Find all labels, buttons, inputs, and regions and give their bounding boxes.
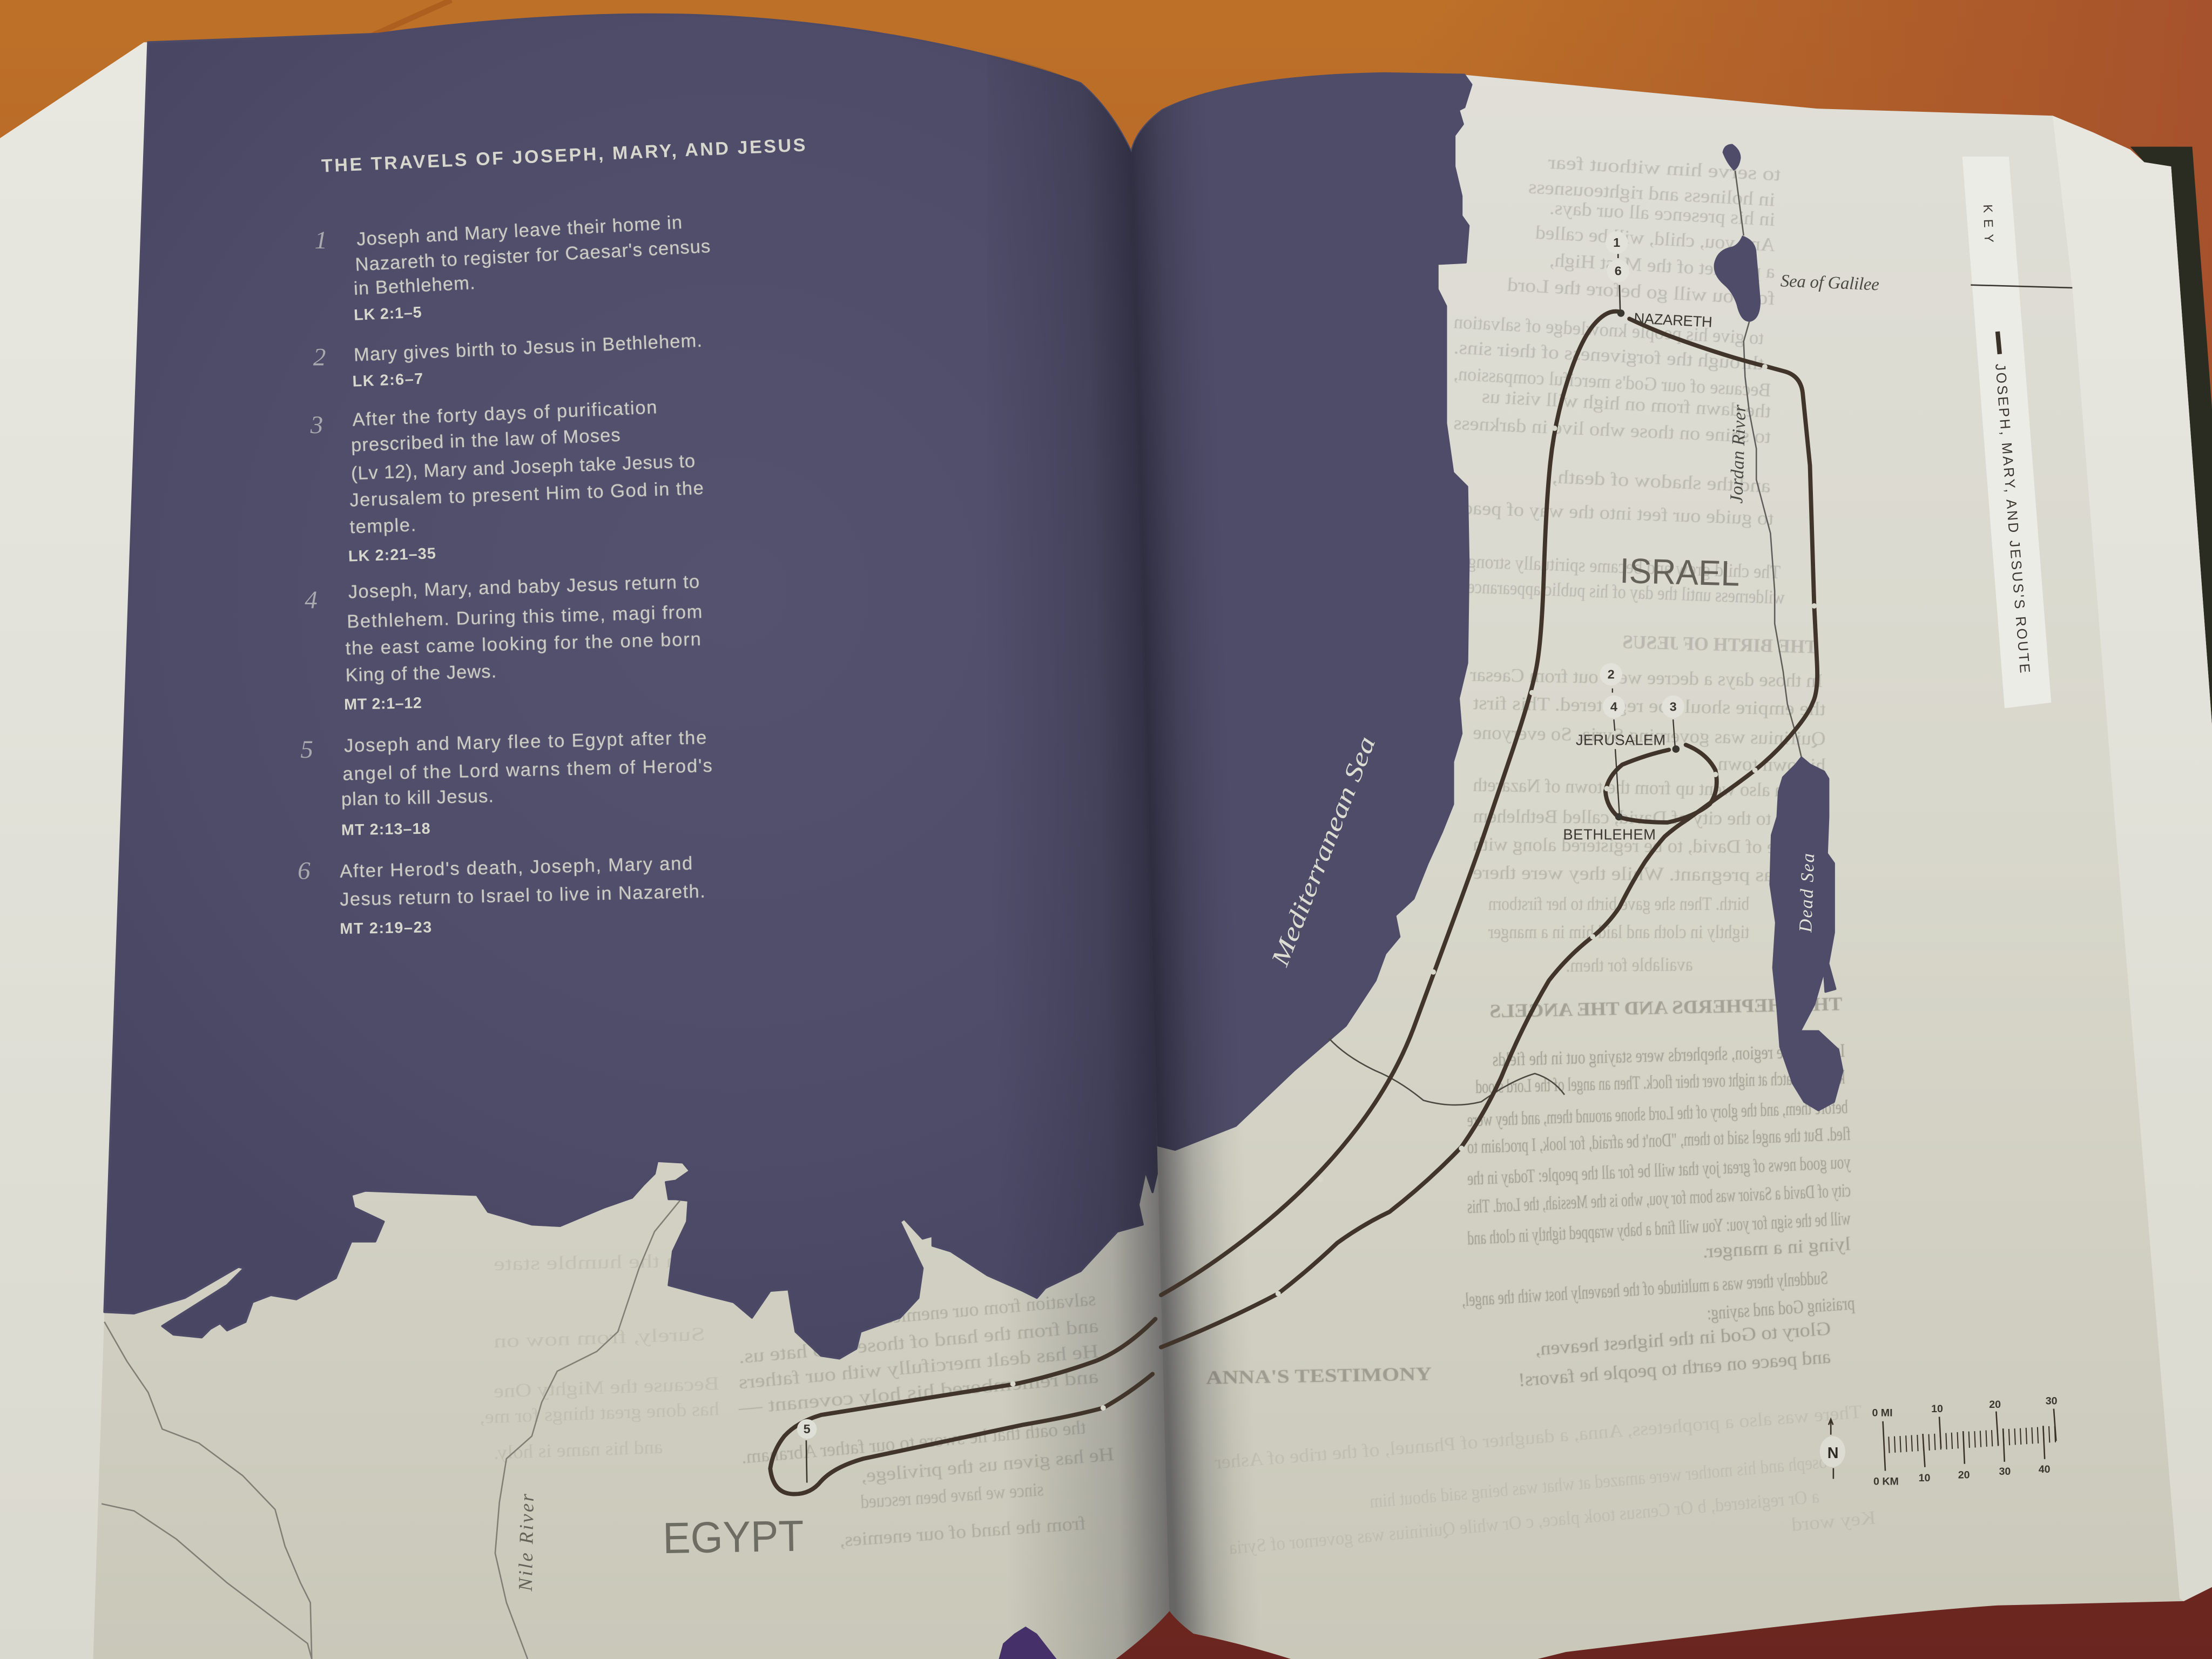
north arrow xyxy=(1820,1419,1845,1479)
show-through text: right page: wilderness until the day of his public appearance xyxy=(1467,576,1785,608)
entry 4: the east came looking for the one born xyxy=(345,629,701,659)
Nile River line xyxy=(495,1201,680,1659)
faint show-through text: left page: on the humble state xyxy=(494,1250,691,1274)
kilometre labels: 0 KM xyxy=(1873,1475,1899,1487)
entry 5: 5 xyxy=(300,736,313,764)
show-through text: left page: He has dealt mercifully with our fathers xyxy=(738,1340,1100,1393)
mile labels: 0 MI xyxy=(1872,1407,1893,1419)
show-through text: right page: his own town. xyxy=(1712,753,1826,776)
inland return road xyxy=(1161,319,1817,1347)
show-through text: right page: to serve him without fear xyxy=(1547,152,1781,185)
show-through text: right page: in holiness and righteousness xyxy=(1528,177,1776,210)
entry 4: Joseph, Mary, and baby Jesus return to xyxy=(348,571,700,603)
show-through text: lower right page: ANNA'S TESTIMONY xyxy=(1206,1363,1432,1388)
show-through text: right page: The child grew and became spiritually strong, xyxy=(1463,551,1781,583)
entry 5: angel of the Lord warns them of Herod's xyxy=(342,756,712,785)
show-through text: right page: the dawn from on high will visit us xyxy=(1481,386,1771,422)
major ticks xyxy=(1883,1409,2056,1471)
number 6: 6 xyxy=(1615,264,1622,278)
kilometre labels: 20 xyxy=(1958,1469,1970,1481)
wood grain streak xyxy=(369,0,451,37)
Egypt border west line xyxy=(104,1322,312,1659)
show-through text: lower right page: and peace on earth to people he favors! xyxy=(1518,1346,1831,1391)
show-through text: lower right page: lying in a manger. xyxy=(1702,1233,1851,1262)
route: westbound journey xyxy=(770,312,1817,1494)
show-through text: right page: THE BIRTH OF JESUS xyxy=(1622,631,1817,657)
number 2: 2 xyxy=(1608,667,1615,681)
entry 6: Jesus return to Israel to live in Nazareth. xyxy=(340,881,705,910)
show-through text: right page: for you will go before the Lord xyxy=(1507,274,1776,309)
Bethlehem dot xyxy=(1615,813,1622,820)
legend text: JOSEPH, MARY, AND JESUS'S ROUTE xyxy=(1992,363,2033,673)
footnotes show-through: right page: Key word xyxy=(1790,1507,1877,1535)
divider xyxy=(1971,285,2072,288)
dark sea region: left page xyxy=(104,15,1157,1359)
name: NAZARETH xyxy=(1634,309,1713,331)
water: Sea of Galilee xyxy=(1714,235,1761,322)
mile labels: 10 xyxy=(1931,1403,1943,1415)
stops 2, 3, 4: Jerusalem and Bethlehem xyxy=(1563,663,1684,842)
show-through text: lower right page xyxy=(1206,993,1856,1391)
gutter shadow: right of fold xyxy=(1131,80,1277,1654)
ticks xyxy=(1889,1426,2055,1453)
entry 1: in Bethlehem. xyxy=(353,273,475,299)
tail xyxy=(1833,1468,1834,1479)
entry 1: Joseph and Mary leave their home in xyxy=(356,212,683,250)
label: Sea of Galilee: Sea of Galilee xyxy=(1780,271,1879,294)
stop 5: Egypt xyxy=(797,1419,817,1482)
show-through text: lower right page: fled. But the angel said to them, "Don't be afraid, for look, I proclaim to xyxy=(1467,1123,1851,1157)
entry 2: LK 2:6–7 xyxy=(352,370,423,390)
show-through text: right page: a prophet of the Most High, xyxy=(1549,249,1776,282)
show-through text: left page xyxy=(737,1288,1115,1551)
show-through text: right page: And you, child, will be called xyxy=(1535,222,1776,255)
show-through text: right page: to give his people knowledge of salvation xyxy=(1453,311,1764,348)
show-through text: right page: to shine on those who live in darkness xyxy=(1453,413,1771,447)
left page xyxy=(0,15,1170,1659)
left page stack edge xyxy=(0,42,148,1659)
entry 4 xyxy=(305,571,703,713)
show-through text: lower right page: praising God and saying: xyxy=(1706,1292,1856,1324)
panel: route description text xyxy=(298,135,807,938)
number 1: 1 xyxy=(1613,235,1620,249)
entry 3: LK 2:21–35 xyxy=(348,545,436,565)
leader lines xyxy=(1618,254,1620,312)
label: Dead Sea: Dead Sea xyxy=(1796,853,1818,933)
entry 6 xyxy=(298,853,705,938)
show-through text: left page: and remembered his holy covenant — xyxy=(737,1366,1100,1418)
scale bar xyxy=(1872,1395,2058,1487)
show-through text: right page: to guide our feet into the way of peace. xyxy=(1449,497,1774,529)
show-through text: lower right page: keeping watch at night over their flock. Then an angel of the Lord stood xyxy=(1475,1067,1845,1097)
show-through text: right page: Judea, to the city of David, called Bethlehem xyxy=(1473,805,1826,830)
green book cover xyxy=(2130,147,2212,725)
ribbon bookmark xyxy=(999,1627,1057,1659)
show-through text: left page: salvation from our enemies xyxy=(884,1288,1096,1327)
show-through text: right page: tightly in cloth and laid him in a manger xyxy=(1488,921,1749,942)
faint show-through text: left page: Because the Mighty One xyxy=(493,1373,720,1402)
show-through text: right page: In those days a decree went out from Caesar xyxy=(1470,664,1823,691)
show-through text: left page: from the hand of our enemies, xyxy=(839,1513,1087,1551)
show-through text: left page: the oath that he swore to our father Abraham. xyxy=(740,1417,1087,1468)
Egypt border lower line xyxy=(102,1504,312,1659)
dot xyxy=(1617,309,1624,317)
heading: THE TRAVELS OF JOSEPH, MARY, AND JESUS xyxy=(321,135,807,177)
entry 3: Jerusalem to present Him to God in the xyxy=(349,478,704,511)
entry 5: MT 2:13–18 xyxy=(341,820,430,839)
mile labels: 20 xyxy=(1989,1399,2001,1411)
mile labels xyxy=(1872,1395,2058,1419)
number 5: 5 xyxy=(804,1422,811,1436)
show-through text: right page: the line of David, to be registered along with xyxy=(1473,834,1826,858)
Jerusalem and Bethlehem loop xyxy=(1606,745,1717,822)
arrow up xyxy=(1829,1419,1833,1435)
entry 5: plan to kill Jesus. xyxy=(341,786,494,810)
show-through text: lower right page: will be the sign for you: You will find a baby wrapped tightly in cloth and xyxy=(1467,1208,1851,1249)
water: Lake Hula xyxy=(1723,144,1741,171)
entry 1: 1 xyxy=(315,226,327,254)
show-through text: right page: Quirinius was governing Syria. So everyone xyxy=(1473,722,1826,749)
Jerusalem dot xyxy=(1673,745,1680,753)
entry 6: After Herod's death, Joseph, Mary and xyxy=(340,853,693,882)
gutter shadow: left of fold xyxy=(988,53,1170,1659)
legend swatch xyxy=(1998,332,2000,354)
entry 1: LK 2:1–5 xyxy=(354,304,422,324)
entry 3: After the forty days of purification xyxy=(352,397,657,430)
map: thin borders and rivers xyxy=(102,171,1802,1659)
halo xyxy=(1820,1436,1845,1467)
entry 2: Mary gives birth to Jesus in Bethlehem. xyxy=(353,331,703,366)
entry 4: King of the Jews. xyxy=(345,661,497,686)
label: Nile River: Nile River xyxy=(514,1493,538,1592)
show-through text: left page: and from the hand of those who hate us. xyxy=(738,1315,1100,1367)
show-through text: lower right page: THE SHEPHERDS AND THE ANGELS xyxy=(1489,993,1843,1022)
route gaps xyxy=(1010,364,1817,1411)
leader lines xyxy=(1613,689,1675,815)
faint show-through text: left page: has done great things for me, xyxy=(479,1398,720,1428)
entry 4: Bethlehem. During this time, magi from xyxy=(347,602,703,632)
footnotes show-through: right page: Joseph and his mother were amazed at what was being said about him xyxy=(1368,1451,1835,1512)
show-through text: lower right page: Suddenly there was a multitude of the heavenly host with the angel, xyxy=(1461,1267,1829,1311)
label: Jordan River: Jordan River xyxy=(1727,404,1750,504)
entry 3: temple. xyxy=(349,515,416,537)
Jerusalem name: JERUSALEM xyxy=(1576,731,1666,748)
show-through text: right page: Because of our God's merciful compassion, xyxy=(1453,363,1771,401)
entry 1 xyxy=(315,212,711,324)
show-through text: right page: available for them. xyxy=(1566,954,1693,976)
kilometre labels: 30 xyxy=(1999,1466,2011,1478)
faint show-through text: left page xyxy=(479,1250,720,1464)
kilometre labels xyxy=(1873,1464,2051,1487)
show-through text: right page: through the forgiveness of their sins. xyxy=(1453,336,1764,374)
show-through text: right page: in his presence all our days. xyxy=(1549,197,1776,230)
show-through text: right page: Joseph also went up from the town of Nazareth xyxy=(1473,774,1826,801)
strip background xyxy=(1963,157,2051,708)
entry 1: Nazareth to register for Caesar's census xyxy=(355,236,711,275)
entry 6: 6 xyxy=(298,857,311,885)
letter N: N xyxy=(1827,1445,1838,1462)
Upper Jordan line xyxy=(1735,171,1744,235)
stop 1 and 6: Nazareth xyxy=(1606,231,1713,331)
entry 3 xyxy=(310,397,704,565)
show-through text: left page: He has given us the privilege, xyxy=(860,1444,1115,1487)
right page xyxy=(1131,73,2212,1659)
number halos xyxy=(1606,231,1628,254)
kilometre labels: 40 xyxy=(2039,1464,2051,1475)
entry 5 xyxy=(300,727,712,839)
halo xyxy=(797,1419,817,1439)
entry 2 xyxy=(313,331,703,390)
footnotes show-through: right page: There was also a prophetess, Anna, a daughter of Phanuel, of the tribe of Asher xyxy=(1214,1401,1863,1473)
show-through text: lower right page: In the same region, shepherds were staying out in the fields xyxy=(1492,1040,1845,1070)
show-through text: lower right page: before them, and the glory of the Lord shone around them, and they were xyxy=(1467,1096,1848,1131)
entry 4: MT 2:1–12 xyxy=(344,694,422,713)
show-through text: lower right page: city of David a Savior was born for you, who is the Messiah, the Lord. This xyxy=(1467,1179,1851,1217)
entry 6: MT 2:19–23 xyxy=(340,919,431,938)
entry 2: 2 xyxy=(313,343,326,372)
show-through text: right page xyxy=(1449,152,1826,976)
number 4: 4 xyxy=(1610,700,1617,714)
dark sea region: right page, Mediterranean coast xyxy=(1131,73,1472,1150)
label: EGYPT: EGYPT xyxy=(662,1512,804,1563)
faint show-through text: left page: and his name is holy. xyxy=(493,1437,663,1464)
mile labels: 30 xyxy=(2046,1395,2058,1407)
show-through text: right page: birth. Then she gave birth to her firstborn xyxy=(1488,893,1749,914)
show-through text: lower right page: you good news of great joy that will be for all the people: Today in the xyxy=(1467,1151,1851,1189)
entry 3: (Lv 12), Mary and Joseph take Jesus to xyxy=(350,451,696,484)
Nazareth to Egypt coast road xyxy=(1161,312,1620,1295)
key strip xyxy=(1963,157,2072,708)
heading KEY: KEY xyxy=(1981,204,1996,243)
entry 3: 3 xyxy=(310,411,323,439)
wood tone on the right xyxy=(1411,0,2212,875)
footnotes show-through: right page: a Or registered, b Or Census took place, c Or while Quirinius was governor of Syria xyxy=(1228,1486,1820,1559)
entry 3: prescribed in the law of Moses xyxy=(350,425,621,456)
leader line xyxy=(806,1440,807,1482)
right page stack edge xyxy=(2053,116,2212,1601)
Bethlehem name: BETHLEHEM xyxy=(1563,826,1656,842)
number 3: 3 xyxy=(1670,700,1677,714)
Egypt hairpin xyxy=(770,1319,1155,1494)
number halos xyxy=(1600,663,1622,686)
faint show-through text: left page: Surely, from now on xyxy=(493,1324,705,1352)
entry 5: Joseph and Mary flee to Egypt after the xyxy=(344,727,707,756)
kilometre labels: 10 xyxy=(1919,1472,1931,1484)
Brook of Egypt line xyxy=(1329,1038,1564,1105)
label: ISRAEL: ISRAEL xyxy=(1619,551,1740,594)
show-through text: lower right page: Glory to God in the highest heaven, xyxy=(1534,1318,1831,1359)
footnotes show-through: right page xyxy=(1214,1401,1877,1559)
show-through text: right page: and was pregnant. While they were there xyxy=(1473,862,1826,886)
show-through text: right page: and the shadow of death, xyxy=(1552,466,1771,497)
show-through text: right page: the empire should be registered. This first xyxy=(1473,692,1826,719)
Jordan River line xyxy=(1744,322,1802,758)
water: Dead Sea xyxy=(1770,758,1843,1110)
label: Mediterranean Sea: Mediterranean Sea xyxy=(1266,732,1381,970)
show-through text: left page: since we have been rescued xyxy=(860,1479,1044,1513)
entry 4: 4 xyxy=(305,586,318,614)
